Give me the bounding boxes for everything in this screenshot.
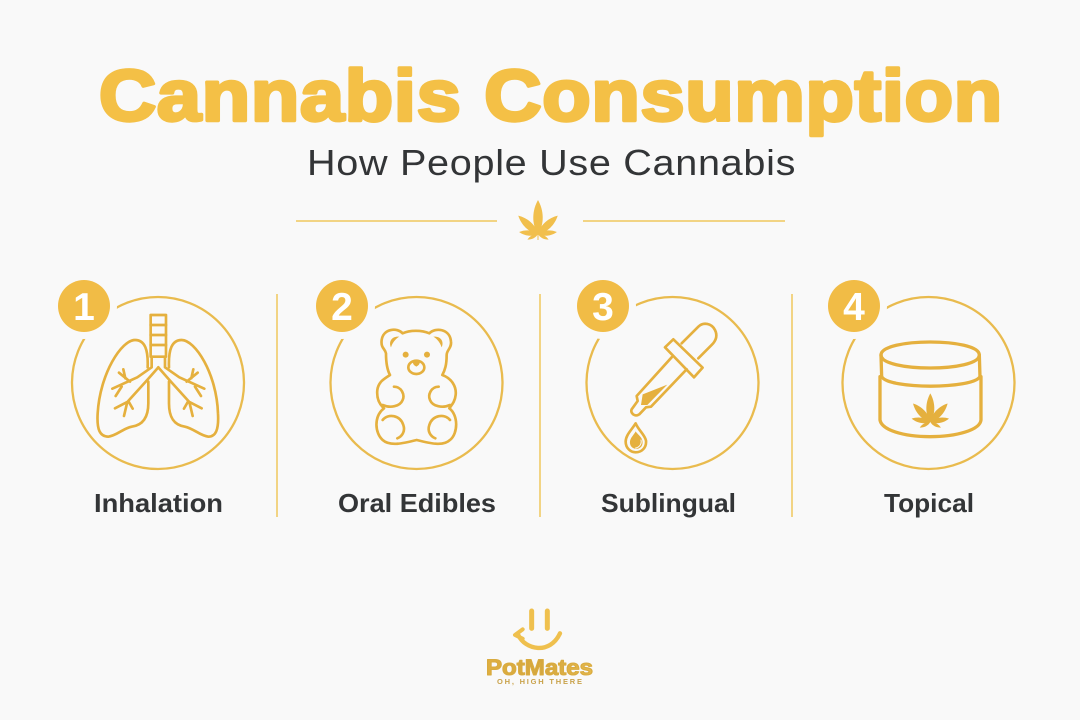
panel: oral edibles — [309, 273, 502, 518]
tagline: OH, HIGH THERE — [497, 677, 582, 686]
icon: jar with leaf — [880, 342, 981, 437]
icon: header cannabis leaf — [516, 200, 560, 241]
label: Sublingual — [601, 488, 736, 518]
badge 4 — [828, 280, 880, 332]
badge 3: 3 — [592, 286, 614, 329]
badge 3 — [577, 280, 629, 332]
icon: lungs — [97, 315, 218, 437]
label: Topical — [884, 488, 974, 518]
panel: sublingual — [570, 273, 758, 518]
icon: smiley — [515, 611, 560, 648]
badge 4: 4 — [843, 286, 865, 329]
badge 2 — [316, 280, 368, 332]
label: Oral Edibles — [338, 488, 496, 518]
panel: inhalation — [51, 273, 244, 518]
badge 1 — [58, 280, 110, 332]
brand name: PotMates — [486, 655, 593, 680]
logo: PotMates — [486, 611, 593, 686]
badge 2: 2 — [331, 286, 353, 329]
icon: gummy bear — [376, 330, 456, 444]
icon: dropper — [626, 324, 716, 452]
label: Inhalation — [94, 488, 223, 518]
subtitle: How People Use Cannabis — [307, 144, 795, 184]
title: Cannabis Consumption — [99, 56, 1002, 137]
panel: topical — [821, 273, 1014, 518]
badge 1: 1 — [73, 286, 95, 329]
